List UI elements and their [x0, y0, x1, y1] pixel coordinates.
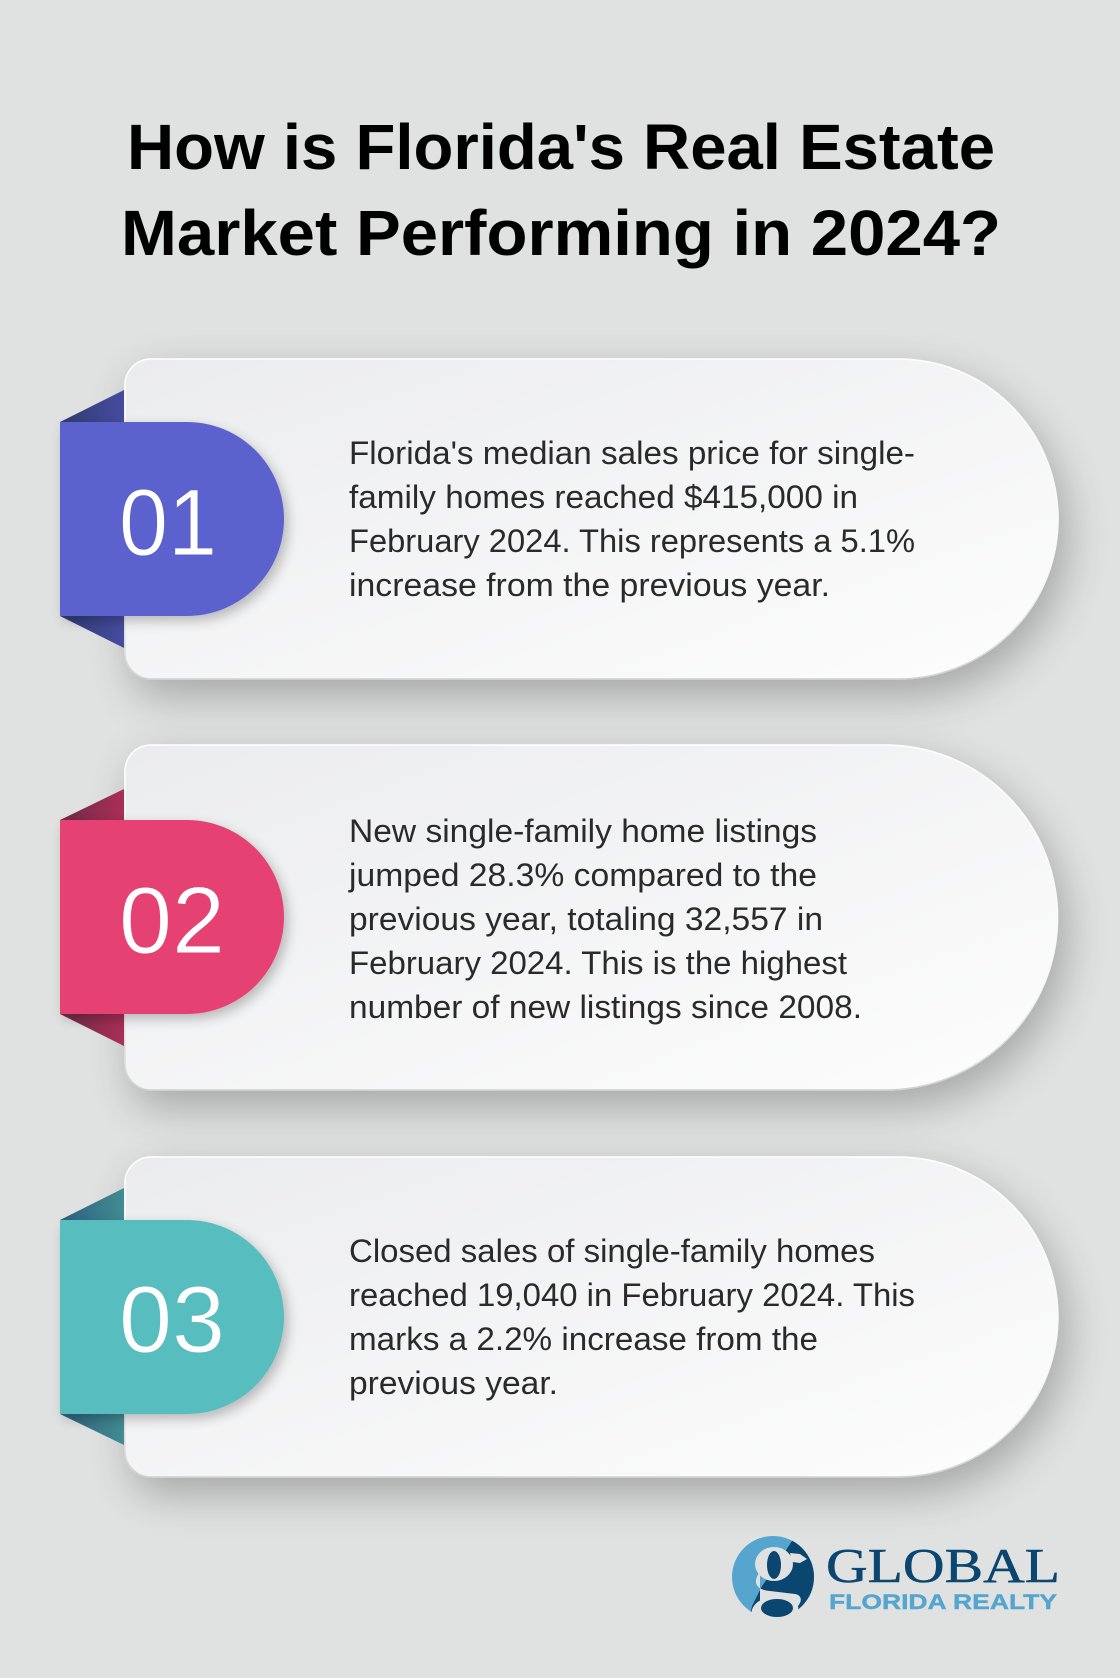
logo tagline: FLORIDA REALTY [829, 1591, 1057, 1614]
title: Market Performing in 2024? [121, 197, 1001, 269]
title [121, 111, 1001, 269]
logo: Global Florida Realty [732, 1536, 1057, 1617]
number tab 03 [60, 1220, 284, 1414]
ribbon fold bottom 02 [60, 1014, 124, 1046]
ribbon fold top 03 [60, 1188, 124, 1220]
number 03: 03 [119, 1267, 225, 1373]
text block 02: number of new listings since 2008. [349, 989, 862, 1025]
text block 03: previous year. [349, 1365, 558, 1401]
text block 03: reached 19,040 in February 2024. This [349, 1277, 915, 1313]
text block 02: New single-family home listings [349, 813, 817, 849]
ribbon fold top 02 [60, 789, 124, 820]
panel: step 01 median sales price [60, 359, 1058, 679]
text block 02 [348, 813, 862, 1025]
number 02: 02 [119, 868, 225, 974]
text block 02: jumped 28.3% compared to the [348, 857, 817, 893]
panel: step 03 closed sales [60, 1157, 1058, 1477]
text block 03: marks a 2.2% increase from the [349, 1321, 818, 1357]
text block 01: family homes reached $415,000 in [349, 479, 858, 515]
text block 01: February 2024. This represents a 5.1% [349, 523, 915, 559]
panel: step 02 new listings [60, 745, 1058, 1090]
card background 02 [125, 745, 1057, 1090]
text block 01: Florida's median sales price for single- [349, 435, 915, 471]
title: How is Florida's Real Estate [127, 111, 995, 183]
ribbon fold top 01 [60, 390, 124, 422]
text block 02: February 2024. This is the highest [349, 945, 847, 981]
card background 03 [125, 1157, 1058, 1477]
number tab 01 [60, 422, 284, 616]
number 01: 01 [119, 470, 217, 576]
card background 01 [125, 359, 1058, 679]
text block 03: Closed sales of single-family homes [349, 1233, 875, 1269]
number tab 02 [60, 820, 284, 1014]
text block 01 [349, 435, 915, 603]
ribbon fold bottom 03 [60, 1414, 124, 1445]
text block 01: increase from the previous year. [349, 567, 830, 603]
text block 02: previous year, totaling 32,557 in [349, 901, 823, 937]
ribbon fold bottom 01 [60, 616, 124, 648]
icon: g emblem [732, 1536, 814, 1617]
text block 03 [349, 1233, 915, 1401]
logo wordmark: GLOBAL [826, 1538, 1060, 1593]
